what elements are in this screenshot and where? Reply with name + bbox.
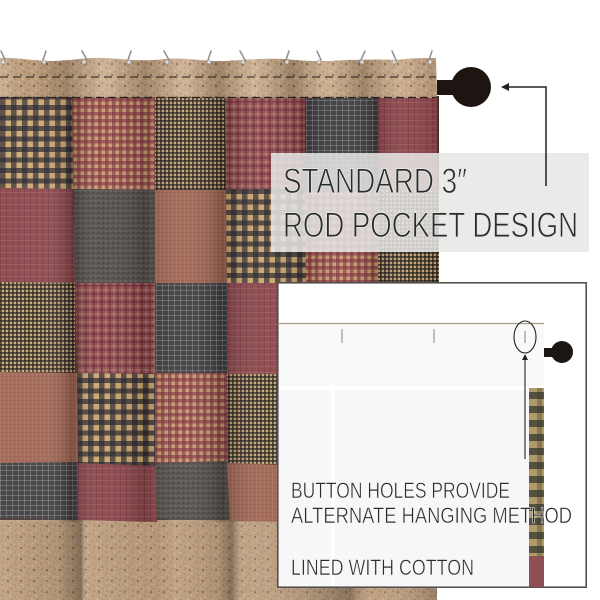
row 3 patches bbox=[0, 282, 285, 374]
checked fabric edge strip bbox=[529, 388, 544, 587]
lining fabric bbox=[279, 323, 544, 586]
arrow to rod bbox=[501, 83, 546, 186]
row 1 patches bbox=[0, 96, 437, 190]
row 2 patches bbox=[0, 188, 439, 283]
inset caption line 1: BUTTON HOLES PROVIDE bbox=[291, 478, 510, 503]
curtain hooks bbox=[1, 51, 432, 67]
bottom flounce bbox=[0, 515, 437, 600]
button holes bbox=[342, 329, 525, 343]
patchwork panels bbox=[0, 96, 439, 522]
callout heading line 1: STANDARD 3″ bbox=[283, 162, 467, 201]
small rod and finial bbox=[544, 341, 573, 363]
row 4 patches bbox=[0, 372, 285, 466]
inset caption line 3: LINED WITH COTTON bbox=[291, 555, 474, 580]
arrow to button hole bbox=[522, 354, 528, 459]
row 5 patches bbox=[0, 461, 285, 522]
curtain rod with round finial bbox=[437, 67, 491, 107]
callout: rod pocket bbox=[271, 153, 589, 252]
curtain bbox=[0, 51, 439, 600]
highlight ellipse around button hole bbox=[514, 321, 536, 353]
inset panel: back of curtain bbox=[278, 283, 586, 587]
rod pocket stitching bbox=[0, 76, 436, 78]
rod pocket header bbox=[0, 58, 437, 98]
